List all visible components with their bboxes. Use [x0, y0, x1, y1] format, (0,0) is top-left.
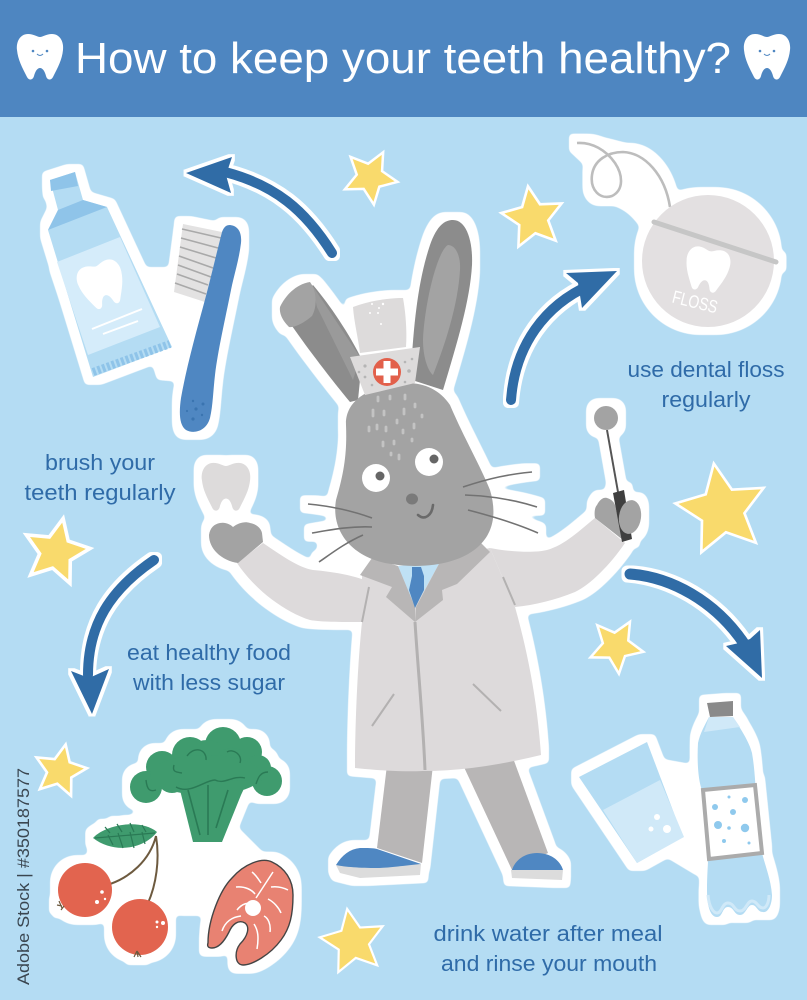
caption: food: with less sugar	[132, 670, 285, 695]
broccoli	[130, 727, 282, 842]
eyes	[362, 448, 443, 492]
legs	[377, 758, 548, 870]
tie	[409, 567, 424, 608]
caption: brush: teeth regularly	[24, 480, 176, 505]
stars	[23, 144, 769, 972]
shoes	[336, 848, 563, 880]
glass of water	[579, 742, 684, 863]
caption: floss: use dental floss	[628, 357, 784, 382]
left ear	[280, 282, 362, 402]
toothpaste tube	[48, 172, 172, 377]
rabbit doctor	[202, 220, 643, 880]
dental mirror and right hand	[594, 406, 643, 542]
food sticker	[57, 727, 293, 965]
floss sticker	[577, 143, 776, 327]
left hand	[209, 522, 263, 563]
caption: floss: regularly	[662, 387, 750, 412]
icon: right smiling tooth	[744, 34, 790, 80]
right ear	[412, 220, 472, 390]
caption: water: and rinse your mouth	[441, 951, 657, 976]
held tooth	[202, 463, 250, 511]
icon: left smiling tooth	[17, 34, 63, 80]
header banner	[0, 0, 807, 117]
icon: red cross	[373, 358, 401, 386]
doctor hat	[353, 298, 406, 353]
arrow: to toothpaste	[186, 157, 332, 253]
arrow: to water	[630, 574, 762, 678]
whiskers	[308, 472, 538, 562]
salmon steak	[208, 860, 293, 965]
hat band	[350, 347, 420, 395]
floss container	[642, 195, 776, 327]
caption: food: eat healthy food	[127, 640, 291, 665]
title: How to keep your teeth healthy?	[75, 34, 731, 83]
cherries	[57, 823, 168, 957]
head fur marks	[369, 395, 422, 459]
toothpaste and toothbrush sticker	[48, 172, 241, 432]
arrow: to floss	[511, 271, 617, 400]
caption: water: drink water after meal	[434, 921, 662, 946]
floss container: FLOSS	[670, 287, 720, 317]
water bottle	[698, 701, 772, 917]
head	[335, 383, 493, 566]
lab coat	[237, 518, 625, 771]
caption: brush: brush your	[45, 450, 155, 475]
toothbrush	[174, 224, 241, 432]
arrow: to food	[71, 560, 154, 714]
stock id vertical text: Adobe Stock | #350187577	[14, 768, 33, 985]
floss string	[577, 143, 670, 207]
nose and smile	[406, 494, 433, 517]
water sticker	[579, 701, 772, 917]
